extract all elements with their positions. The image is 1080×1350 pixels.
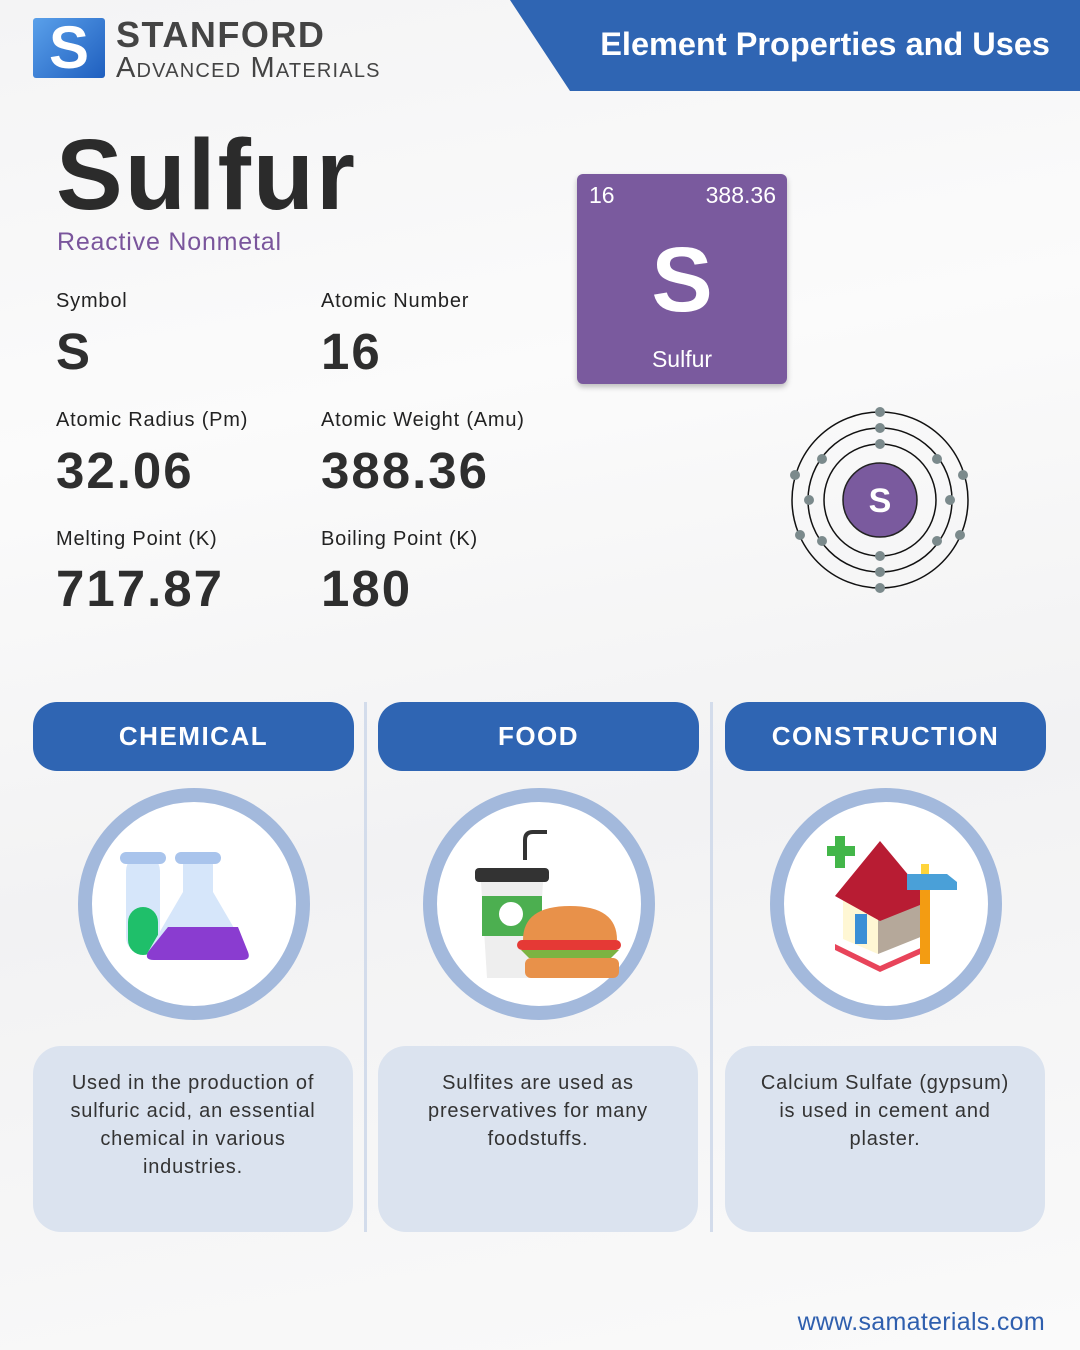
title: Sulfur bbox=[56, 119, 357, 231]
icon: drink and burger bbox=[475, 830, 621, 978]
properties bbox=[56, 290, 525, 617]
element tile: 388.36 bbox=[706, 182, 776, 208]
properties: Symbol bbox=[56, 290, 128, 312]
column: construction bbox=[725, 702, 1046, 1232]
column: chemical bbox=[33, 702, 354, 1232]
subtitle: Reactive Nonmetal bbox=[57, 228, 282, 256]
column: chemical: CHEMICAL bbox=[119, 721, 268, 751]
properties: Boiling Point (K) bbox=[321, 528, 478, 550]
header banner bbox=[510, 0, 1080, 91]
logo: Advanced Materials bbox=[116, 52, 381, 84]
column: construction: Calcium Sulfate (gypsum) is used in cement and plaster. bbox=[761, 1072, 1009, 1150]
atom diagram: S bbox=[869, 482, 891, 520]
properties: Atomic Number bbox=[321, 290, 469, 312]
footer url: www.samaterials.com bbox=[798, 1308, 1045, 1336]
properties: 180 bbox=[321, 560, 412, 617]
properties: 32.06 bbox=[56, 442, 194, 499]
properties: Melting Point (K) bbox=[56, 528, 217, 550]
column: food: FOOD bbox=[498, 721, 579, 751]
icon: logo S: S bbox=[49, 14, 89, 81]
icon: house with hammer bbox=[827, 836, 957, 972]
element tile: 16 bbox=[589, 182, 615, 208]
icon: logo S bbox=[33, 18, 105, 78]
brand name: STANFORD bbox=[116, 14, 325, 55]
column: construction: CONSTRUCTION bbox=[772, 721, 999, 751]
properties: 388.36 bbox=[321, 442, 489, 499]
properties: S bbox=[56, 323, 92, 380]
properties: 717.87 bbox=[56, 560, 224, 617]
element tile bbox=[577, 174, 787, 384]
properties: Atomic Radius (Pm) bbox=[56, 409, 248, 431]
column: chemical: Used in the production of sulfuric acid, an essential chemical in various industries. bbox=[70, 1072, 316, 1178]
icon: flasks bbox=[120, 852, 250, 960]
properties: Atomic Weight (Amu) bbox=[321, 409, 525, 431]
element tile: S bbox=[651, 229, 713, 331]
header banner: Element Properties and Uses bbox=[600, 26, 1050, 62]
element tile: Sulfur bbox=[652, 346, 712, 372]
column: food bbox=[378, 702, 699, 1232]
logo bbox=[33, 14, 381, 84]
column: food: Sulfites are used as preservatives for many foodstuffs. bbox=[428, 1072, 648, 1150]
properties: 16 bbox=[321, 323, 382, 380]
atom diagram bbox=[790, 407, 969, 593]
